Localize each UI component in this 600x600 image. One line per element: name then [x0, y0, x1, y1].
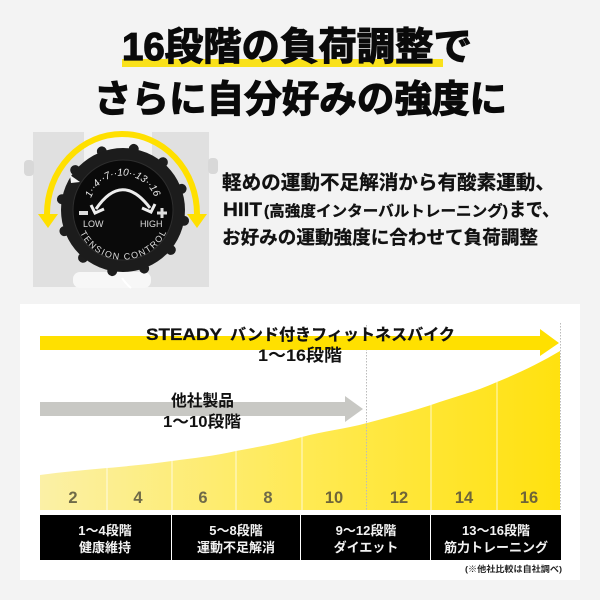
- band: 9-12 levels, diet: 9〜12段階: [336, 523, 396, 538]
- band: 9-12 levels, diet: [301, 515, 430, 560]
- axis level numbers: 8: [263, 489, 273, 507]
- axis level numbers: 2: [68, 489, 78, 507]
- band: 13-16 levels, strength: 筋力トレーニング: [444, 540, 548, 555]
- band: 5-8 levels, lack of exercise: 運動不足解消: [197, 540, 275, 555]
- TENSION CONTROL label: TENSION CONTROL: [81, 230, 166, 260]
- axis level numbers: 4: [133, 489, 143, 507]
- axis level numbers: 12: [390, 489, 408, 507]
- label: other brands: 他社製品: [171, 392, 234, 410]
- label: STEADY product: [146, 325, 455, 344]
- arrow: STEADY range: [40, 329, 559, 356]
- axis level numbers: 16: [520, 489, 538, 507]
- title line 1: 16段階の負荷調整で: [122, 26, 472, 69]
- white arc arrow: [91, 190, 155, 213]
- plus sign: [157, 208, 167, 218]
- description line 2: HIIT: [223, 200, 262, 221]
- axis level numbers: [68, 489, 538, 507]
- dial scale numbers: 1··4··7··10··13··16: [86, 168, 160, 198]
- title highlight underline: [122, 59, 443, 67]
- area chart: load curve: [40, 351, 560, 510]
- axis level numbers: 6: [198, 489, 208, 507]
- axis level numbers: 14: [455, 489, 474, 507]
- label: STEADY product: バンド付きフィットネスバイク: [230, 326, 455, 344]
- dial photo: [24, 131, 218, 288]
- label: other brands 1-10 levels: 1〜10段階: [163, 413, 241, 431]
- band: 13-16 levels, strength: [431, 515, 561, 560]
- description line 2: (高強度インターバルトレーニング): [264, 202, 508, 220]
- LOW label: LOW: [83, 219, 104, 229]
- icon: yellow two-way arc arrow: [38, 134, 207, 228]
- footnote: (※他社比較は自社調べ): [465, 564, 562, 574]
- minus sign: [79, 211, 88, 215]
- axis level numbers: 10: [325, 489, 343, 507]
- band: 5-8 levels, lack of exercise: 5〜8段階: [209, 523, 263, 538]
- description line 2: まで、: [509, 200, 559, 221]
- description line 3: お好みの運動強度に合わせて負荷調整: [222, 227, 538, 248]
- HIGH label: HIGH: [140, 219, 162, 229]
- title line 2: さらに自分好みの強度に: [94, 78, 507, 120]
- description text: [222, 172, 559, 248]
- band: 9-12 levels, diet: ダイエット: [334, 540, 398, 555]
- label: STEADY product: STEADY: [146, 325, 223, 344]
- band: 1-4 levels, health: 1〜4段階: [78, 523, 132, 538]
- arrow: competitor range: [40, 396, 363, 422]
- description line 1: 軽めの運動不足解消から有酸素運動、: [222, 172, 555, 194]
- dial pointer: [70, 175, 80, 183]
- title: [94, 26, 507, 120]
- band: 1-4 levels, health: 健康維持: [79, 540, 131, 555]
- description line 2: [223, 200, 559, 221]
- band: 5-8 levels, lack of exercise: [172, 515, 300, 560]
- panel: comparison chart: [20, 304, 580, 580]
- band: 1-4 levels, health: [40, 515, 171, 560]
- dial knob: [57, 144, 189, 276]
- label: STEADY 1-16 levels: 1〜16段階: [258, 346, 342, 365]
- bike frame background: [24, 132, 218, 288]
- band: 13-16 levels, strength: 13〜16段階: [462, 523, 530, 538]
